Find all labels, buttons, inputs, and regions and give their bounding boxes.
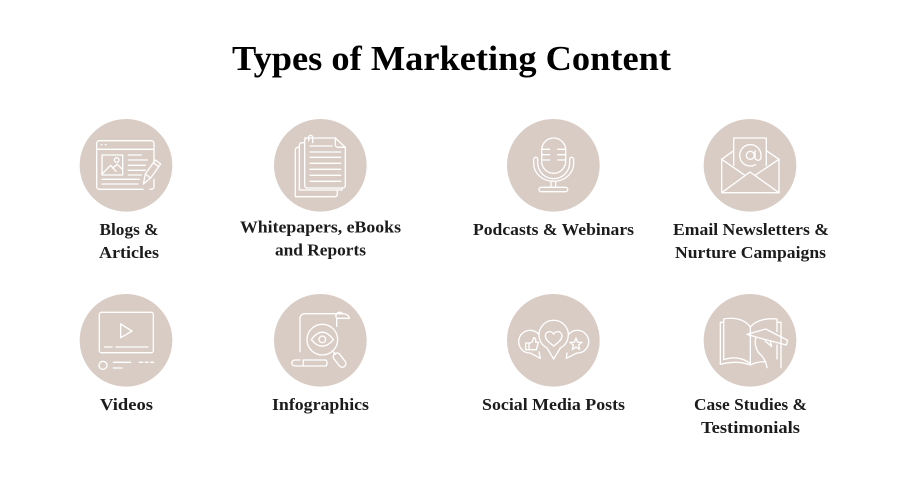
- label: blogs and articles: [99, 220, 160, 262]
- panel: podcasts and webinars: [473, 119, 635, 239]
- label: blogs and articles: Articles: [99, 243, 160, 262]
- panel: case studies and testimonials: [694, 294, 807, 437]
- label: podcasts and webinars: Podcasts & Webinars: [473, 220, 635, 239]
- icon: speech bubbles with thumb, heart and star: [507, 294, 600, 387]
- label: email newsletters and nurture campaigns: [673, 220, 829, 262]
- icon: video player: [80, 294, 172, 387]
- panel: email newsletters and nurture campaigns: [673, 119, 829, 262]
- icon: blog page with pencil: [80, 119, 172, 212]
- label: case studies and testimonials: [694, 395, 807, 437]
- label: email newsletters and nurture campaigns: Email Newsletters &: [673, 220, 829, 239]
- icon: open envelope with at sign: [704, 119, 796, 212]
- label: videos: Videos: [100, 395, 154, 414]
- icon: scroll with magnifier and eye: [274, 294, 367, 387]
- label: whitepapers, ebooks and reports: and Reports: [275, 240, 367, 260]
- icon: stack of documents: [274, 119, 367, 212]
- title: Types of Marketing Content: [232, 40, 672, 78]
- label: whitepapers, ebooks and reports: [240, 218, 402, 260]
- panel: videos: [80, 294, 172, 414]
- icon: microphone: [507, 119, 600, 212]
- label: email newsletters and nurture campaigns: Nurture Campaigns: [675, 243, 827, 262]
- icon: open book with writing hand: [704, 294, 796, 387]
- label: case studies and testimonials: Testimonials: [701, 418, 801, 437]
- panel: infographics: [272, 294, 370, 414]
- panel: social media posts: [482, 294, 626, 414]
- label: blogs and articles: Blogs &: [100, 220, 158, 239]
- label: infographics: Infographics: [272, 395, 370, 414]
- panel: whitepapers, ebooks and reports: [240, 119, 402, 260]
- panel: blogs and articles: [80, 119, 172, 262]
- label: case studies and testimonials: Case Studies &: [694, 395, 807, 414]
- label: social media posts: Social Media Posts: [482, 395, 626, 414]
- label: whitepapers, ebooks and reports: Whitepapers, eBooks: [240, 218, 402, 236]
